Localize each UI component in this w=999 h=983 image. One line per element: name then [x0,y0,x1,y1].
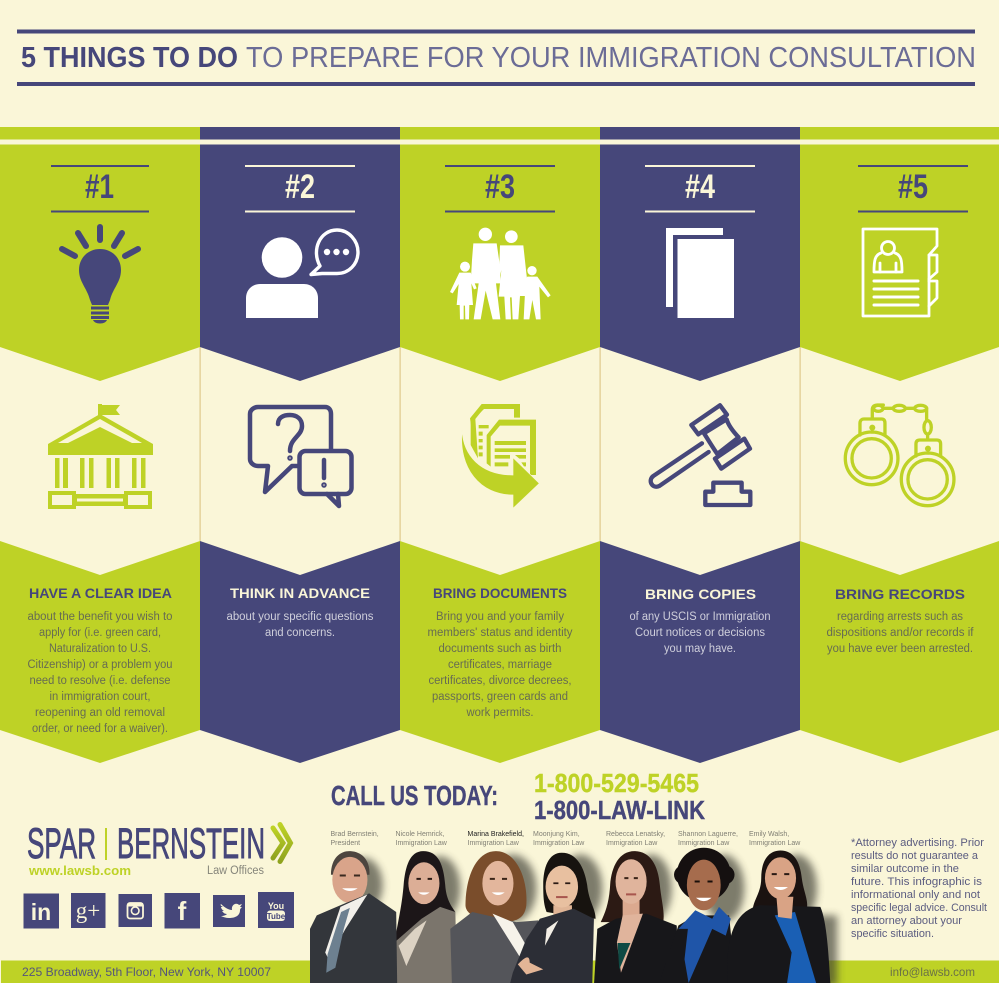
disclaimer [851,837,987,940]
text block: have a clear idea: reopening an old removal [35,707,165,719]
step number 4: #4 [685,168,715,206]
call to action [331,768,705,825]
icon: youtube: You [268,901,284,911]
text block: bring documents: passports, green cards and [432,691,568,703]
text block: bring copies: you may have. [664,643,736,655]
disclaimer: informational only and not [851,889,980,901]
text block: bring documents: certificates, divorce decrees, [428,675,572,687]
footer contact bar: 225 Broadway, 5th Floor, New York, NY 10007 [22,965,271,979]
step number 2 [245,165,355,212]
person: Marina [450,851,538,983]
person: Moonjung [509,853,596,983]
person: Shannon [658,848,736,983]
title: TO PREPARE FOR YOUR IMMIGRATION CONSULTATION [246,42,976,74]
text block: bring records: dispositions and/or records if [826,627,974,639]
team names: Immigration Law [468,840,520,847]
icon: facebook [164,893,200,928]
team names: Brad Bernstein, [330,831,379,838]
icon: youtube: Tube [267,912,286,921]
panel: step 1 [0,127,200,763]
icon: google plus [71,893,106,928]
text block: have a clear idea: need to resolve (i.e. defense [30,675,170,687]
disclaimer: specific situation. [851,928,934,940]
icon: instagram [118,894,152,927]
icon: light bulb [62,227,138,324]
text block: have a clear idea: order, or need for a waiver). [32,723,168,735]
panel: step 5 [800,127,999,763]
social icons [24,892,294,928]
disclaimer: results do not guarantee a [851,850,979,862]
icon: youtube [258,892,294,928]
icon: copies [666,228,735,319]
step number 3: #3 [485,168,515,206]
text block: bring documents [428,611,573,719]
icon: family [450,228,551,319]
heading: think in advance: THINK IN ADVANCE [230,585,370,601]
logo: Spar Bernstein [27,820,290,878]
disclaimer: similar outcome in the [851,863,959,875]
panel: step 2 [200,127,400,763]
disclaimer: an attorney about your [851,915,962,927]
footer contact bar: info@lawsb.com [890,965,975,979]
team names: Moonjung Kim, [533,831,580,838]
team names: Immigration Law [606,840,658,847]
icon: courthouse [48,404,153,509]
person: Nicole [386,851,457,983]
call to action: 1-800-LAW-LINK [534,795,705,825]
text block: have a clear idea: in immigration court, [50,691,150,703]
text block: bring records: you have ever been arrested. [827,643,973,655]
icon: record folder [863,229,937,316]
icon: facebook: f [178,896,187,926]
team names: Immigration Law [533,840,585,847]
step number 4 [645,165,755,212]
disclaimer: future. This infographic is [851,876,983,888]
logo: Spar Bernstein: SPAR [27,820,96,868]
title: 5 THINGS TO DO [21,42,238,74]
logo: Spar Bernstein: www.lawsb.com [28,863,131,878]
team photo [310,848,837,983]
person: Rebecca [594,851,678,983]
icon: linkedin [24,894,59,928]
icon: gavel [651,405,750,505]
team names: Emily Walsh, [749,831,789,838]
team names: Immigration Law [396,840,448,847]
icon: linkedin: in [31,899,51,925]
step number 5: #5 [898,168,928,206]
call to action: CALL US TODAY: [331,780,498,811]
text block: bring records: regarding arrests such as [837,611,963,623]
text block: bring copies: of any USCIS or Immigration [630,611,770,623]
heading: have a clear idea: HAVE A CLEAR IDEA [29,585,172,601]
disclaimer: specific legal advice. Consult [851,902,987,914]
heading: bring documents: BRING DOCUMENTS [433,585,567,601]
step number 3 [445,165,555,212]
icon: question and exclamation bubbles [250,407,352,506]
text block: have a clear idea: about the benefit you wish to [28,611,172,623]
text block: think in advance [226,611,374,639]
panel: step 4 [600,127,800,763]
text block: have a clear idea: Citizenship) or a problem you [28,659,172,671]
text block: think in advance: about your specific questions [226,611,374,623]
text block: bring documents: Bring you and your family [436,611,564,623]
separators [200,347,801,541]
panel: step 3 [400,127,600,763]
team names: President [330,840,360,847]
team names: Nicole Hemrick, [396,831,445,838]
person shadows [345,854,837,983]
text block: bring copies: Court notices or decisions [635,627,765,639]
icon: google plus: g+ [76,898,100,923]
footer contact bar [1,960,999,983]
team names [330,831,801,847]
person: Brad [310,851,397,983]
person: Emily [727,850,831,983]
team names: Shannon Laguerre, [678,831,738,838]
text block: bring documents: work permits. [466,707,534,719]
icon: documents with arrow [462,404,539,508]
team names: Marina Brakefield, [468,831,524,838]
icon: twitter [213,895,245,927]
call to action: 1-800-529-5465 [534,768,699,798]
icon: person with speech bubble [246,230,358,318]
text block: bring records [826,611,974,655]
text block: bring documents: members' status and identity [428,627,573,639]
icon: handcuffs [845,405,954,506]
step number 1 [51,165,149,212]
team names: Immigration Law [678,840,730,847]
text block: think in advance: and concerns. [265,627,335,639]
team names: Immigration Law [749,840,801,847]
heading: bring records: BRING RECORDS [835,586,965,602]
text block: bring copies [630,611,770,655]
team names: Rebecca Lenatsky, [606,831,665,838]
text block: have a clear idea: Naturalization to U.S. [49,643,151,655]
logo: Spar Bernstein: Law Offices [207,865,264,877]
title [17,30,976,86]
step number 5 [858,165,968,212]
heading: bring copies: BRING COPIES [645,586,756,602]
text block: have a clear idea [28,611,172,735]
text block: bring documents: certificates, marriage [448,659,552,671]
text block: bring documents: documents such as birth [438,643,562,655]
logo: Spar Bernstein: BERNSTEIN [117,820,265,868]
step number 1: #1 [85,168,114,206]
text block: have a clear idea: apply for (i.e. green card, [39,627,161,639]
step number 2: #2 [285,168,315,206]
disclaimer: *Attorney advertising. Prior [851,837,984,849]
